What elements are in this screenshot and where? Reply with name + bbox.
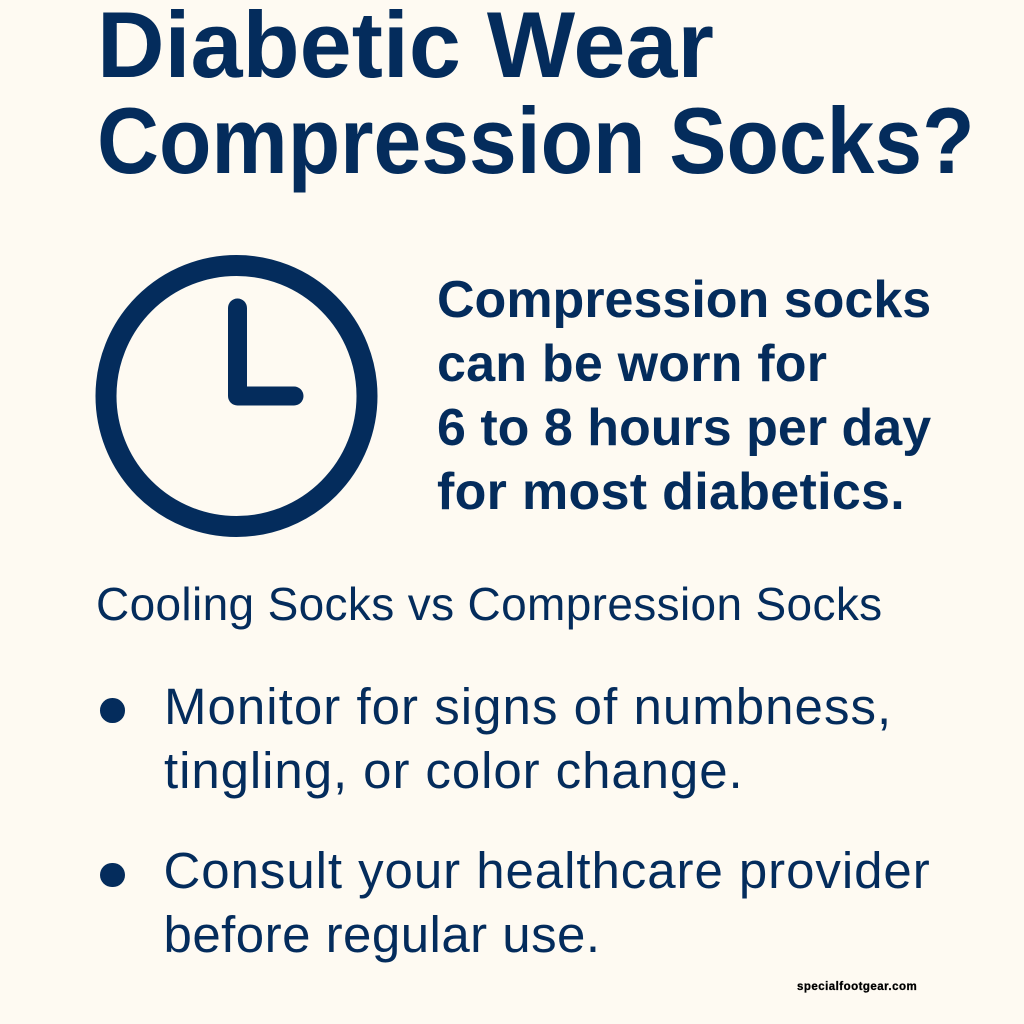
icon: clock [96,255,378,537]
bullet 2 text: before regular use. [164,906,601,963]
key message: 6 to 8 hours per day [437,399,931,457]
bullet list [100,678,931,963]
subheading: Cooling Socks vs Compression Socks [96,578,883,630]
bullet 1 marker [100,698,124,722]
bullet 1 text: tingling, or color change. [164,742,744,799]
bullet 2 marker [100,863,124,887]
bullet 1 text: Monitor for signs of numbness, [164,678,892,735]
bullet 2 text [164,842,931,963]
key message [437,271,931,521]
bullet 2 text: Consult your healthcare provider [164,842,931,899]
title: Compression Socks? [97,88,975,192]
key message: Compression socks [437,271,931,329]
title [97,0,975,192]
bullet 1 text [164,678,892,799]
key message: can be worn for [437,335,827,393]
website credit: specialfootgear.com [797,981,917,993]
key message: for most diabetics. [437,463,905,521]
